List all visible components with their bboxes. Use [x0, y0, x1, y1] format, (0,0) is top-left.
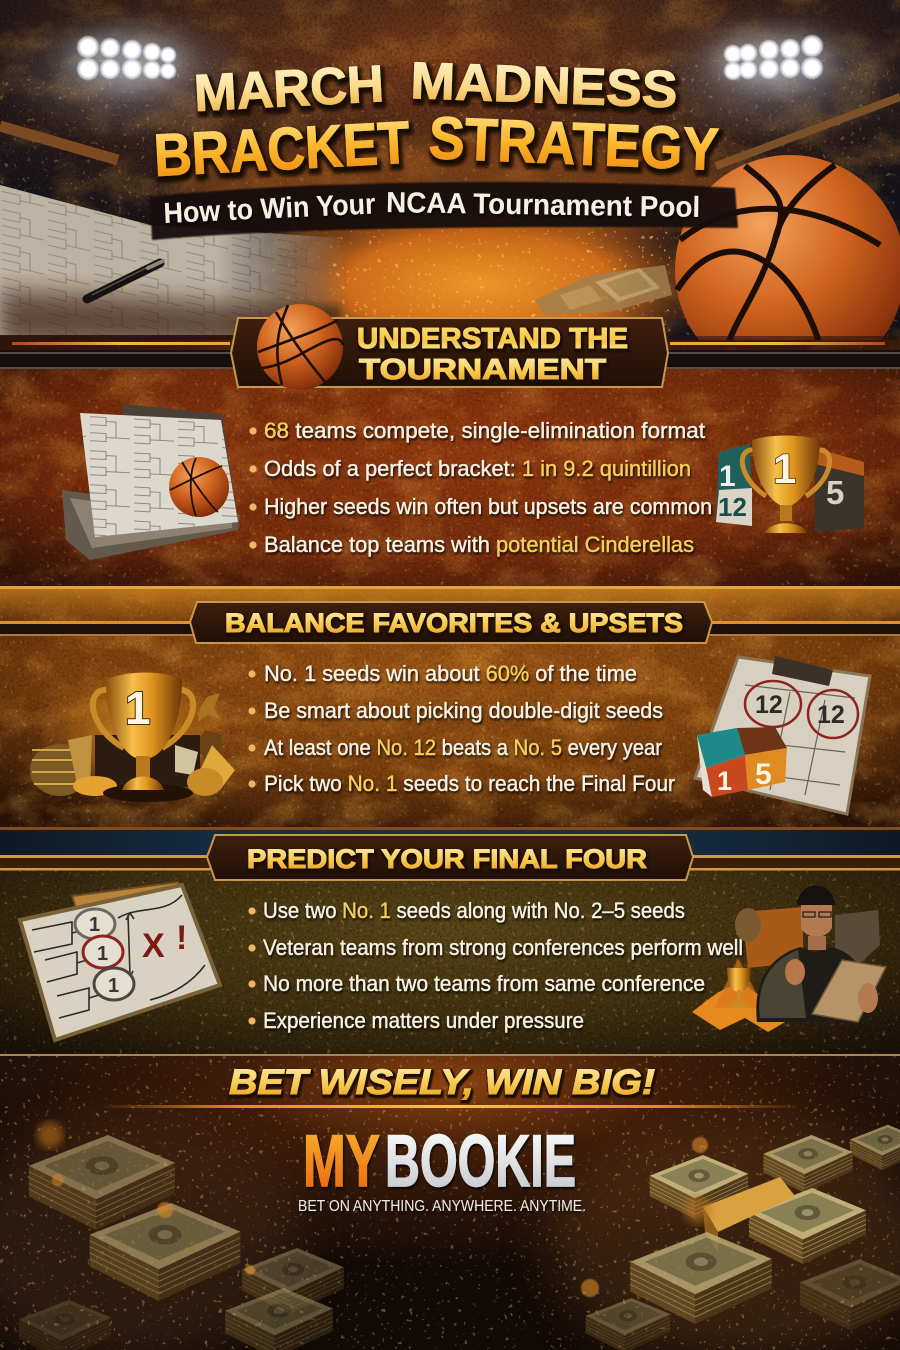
icon: left stadium lights	[66, 34, 190, 86]
panel: balance favorites and upsets	[0, 586, 900, 827]
subtitle	[163, 187, 700, 230]
icon: cash pile in hero	[535, 265, 672, 315]
bullet list: Experience matters under pressure	[263, 1008, 584, 1033]
bullet list	[249, 418, 712, 557]
icon: bracket paper with X!: 1	[97, 943, 108, 965]
bullet list: Use two No. 1 seeds along with No. 2–5 seeds	[263, 898, 685, 923]
title: STRATEGY	[427, 104, 720, 183]
bullet list: At least one No. 12 beats a No. 5 every year	[264, 735, 662, 760]
icon: bracket paper with X!	[20, 882, 220, 1040]
icon: trophy with seed cards	[716, 436, 864, 533]
background: stadium hero	[0, 0, 900, 380]
panel: predict your final four	[0, 827, 900, 1055]
icon: bracket paper with X!: X	[142, 927, 165, 965]
icon: coach with clipboard and trophy	[692, 886, 886, 1032]
icon: right stadium lights	[710, 34, 834, 86]
subtitle banner	[150, 182, 738, 240]
bullet list	[248, 661, 675, 796]
icon: trophy with seed cards: 12	[718, 492, 747, 522]
icon: bracket paper with X!: 1	[108, 975, 119, 997]
icon: trophy with coins and stars	[30, 665, 235, 805]
logo: MyBookie: BOOKIE	[385, 1121, 576, 1202]
icon: pen	[87, 261, 163, 299]
money stacks right	[581, 1125, 900, 1350]
logo tagline: BET ON ANYTHING. ANYWHERE. ANYTIME.	[298, 1198, 586, 1215]
panel: understand the tournament	[0, 304, 900, 587]
panel: footer	[0, 1054, 900, 1350]
bullet list: Pick two No. 1 seeds to reach the Final Four	[264, 771, 675, 796]
title: BRACKET	[152, 109, 411, 189]
icon: clipboard with circled 12s and dice	[695, 656, 870, 814]
bullet list: No more than two teams from same conference	[263, 971, 705, 996]
section header plate	[190, 602, 712, 643]
icon: bracket paper with X!: 1	[89, 914, 100, 936]
bullet list: Higher seeds win often but upsets are common	[264, 494, 712, 519]
title	[152, 52, 720, 189]
subtitle: How to Win Your	[163, 188, 376, 230]
money stacks left	[19, 1122, 344, 1350]
section heading: TOURNAMENT	[359, 354, 606, 386]
logo: MyBookie	[303, 1121, 576, 1202]
subtitle: NCAA Tournament Pool	[386, 187, 700, 224]
section header plate	[207, 835, 693, 880]
section heading	[357, 323, 628, 386]
icon: clipboard with circled 12s and dice: 12	[817, 701, 845, 729]
icon: basketball	[257, 304, 343, 390]
section heading: BALANCE FAVORITES & UPSETS	[225, 608, 683, 638]
bullet list: Balance top teams with potential Cinderellas	[264, 532, 694, 557]
logo: MyBookie: MY	[303, 1121, 380, 1202]
icon: trophy with seed cards: 5	[826, 474, 844, 511]
icon: clipboard with circled 12s and dice: 5	[755, 758, 772, 791]
icon: bracket sheets with basketball	[62, 404, 240, 560]
icon: hero basketball	[675, 155, 900, 385]
title: MADNESS	[410, 52, 678, 119]
illustration: tournament bracket sheet	[0, 185, 350, 345]
icon: trophy with seed cards: 1	[719, 460, 736, 493]
bullet list: Veteran teams from strong conferences perform well	[263, 935, 743, 960]
bullet list: No. 1 seeds win about 60% of the time	[264, 661, 637, 686]
section heading: PREDICT YOUR FINAL FOUR	[247, 844, 647, 874]
section header plate	[231, 304, 668, 390]
tagline heading: BET WISELY, WIN BIG!	[229, 1063, 655, 1102]
bullet list: Be smart about picking double-digit seeds	[264, 698, 663, 723]
title: MARCH	[193, 55, 385, 123]
icon: clipboard with circled 12s and dice: 12	[755, 691, 783, 719]
icon: clipboard with circled 12s and dice: 1	[717, 766, 732, 796]
bullet list	[248, 898, 743, 1033]
icon: trophy with seed cards: 1	[773, 445, 796, 492]
section heading: UNDERSTAND THE	[357, 323, 628, 355]
bullet list: Odds of a perfect bracket: 1 in 9.2 quintillion	[264, 456, 691, 481]
icon: bracket paper with X!: !	[176, 919, 187, 957]
bullet list: 68 teams compete, single-elimination format	[264, 418, 705, 443]
icon: trophy with coins and stars: 1	[125, 682, 151, 734]
